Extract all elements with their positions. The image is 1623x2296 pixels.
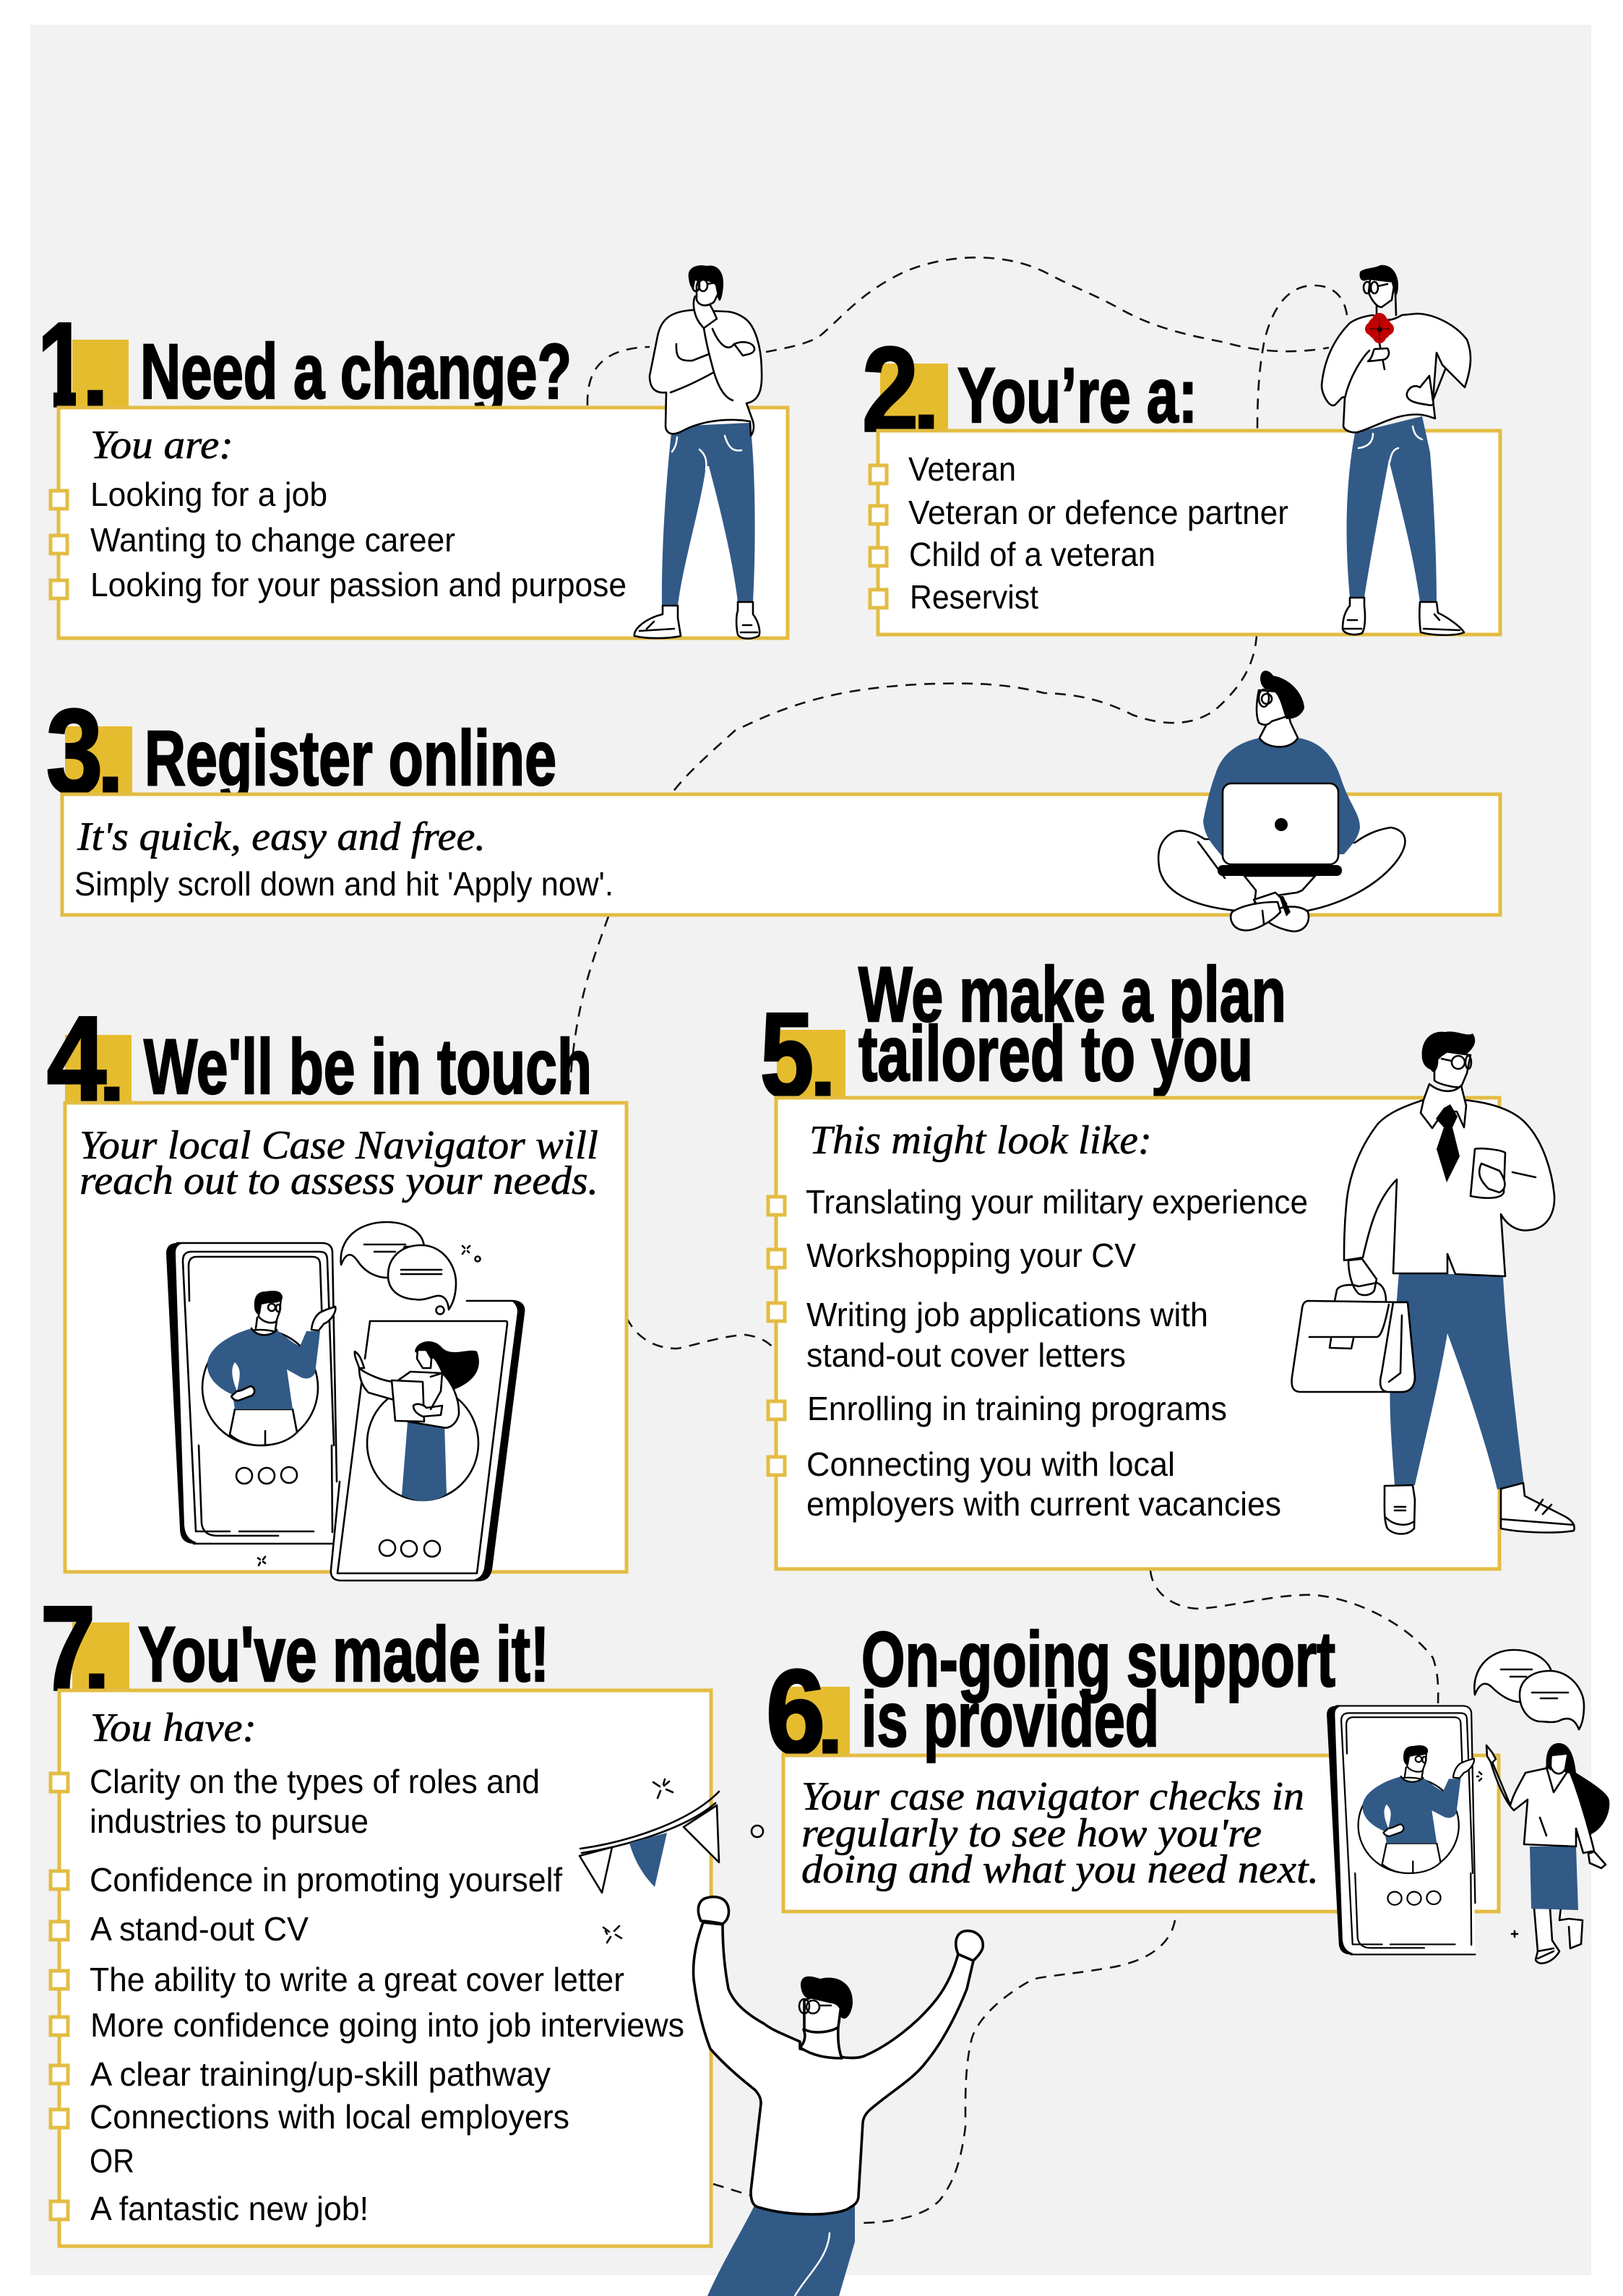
laptop: [1218, 783, 1342, 876]
step 7 section: [40, 1582, 983, 2296]
step 4 number: .: [97, 1005, 127, 1126]
step 2 heading: You’re a:: [957, 351, 1197, 439]
step 4 italic lead: Your local Case Navigator will: [79, 1123, 598, 1168]
step 5 heading: We make a plan: [858, 950, 1286, 1038]
bullet list: Reservist: [910, 578, 1038, 616]
three dots: [236, 1467, 297, 1484]
step 4 section: [47, 992, 627, 1581]
bullet list: Child of a veteran: [909, 536, 1155, 573]
step 6 heading: [861, 1615, 1335, 1763]
step 1 heading: Need a change?: [140, 327, 572, 415]
step 3 panel: [62, 794, 1500, 915]
bullet list: industries to pursue: [90, 1802, 369, 1840]
figure: celebrating man: [694, 1897, 983, 2296]
step 1 section: [38, 265, 788, 639]
step 7 number: .: [82, 1591, 112, 1713]
step 3 number: 3: [46, 685, 103, 819]
poppy flower: [1365, 313, 1394, 343]
illustration: phone with case navigator: [166, 1243, 337, 1544]
step 4 heading: We'll be in touch: [144, 1023, 592, 1110]
step 6 section: [766, 1615, 1609, 1964]
step 4 italic lead: reach out to assess your needs.: [79, 1158, 598, 1203]
step 4 italic lead: [79, 1123, 598, 1203]
bullet list: Workshopping your CV: [806, 1237, 1136, 1274]
step 6 heading: On-going support: [861, 1615, 1335, 1703]
step 4 panel: [65, 1103, 627, 1572]
bullet list: Writing job applications with: [806, 1296, 1208, 1333]
figure: thinking man: [634, 265, 762, 639]
step 6 italic lead: Your case navigator checks in: [801, 1774, 1304, 1819]
figure: businessman: [1292, 1031, 1575, 1534]
crossed feet: [1231, 876, 1315, 932]
step 5 italic lead: This might look like:: [809, 1118, 1152, 1163]
bullet list: More confidence going into job interviews: [90, 2006, 684, 2044]
step 1 badge: [72, 340, 129, 408]
step 3 italic lead: It's quick, easy and free.: [77, 814, 486, 859]
bullet list: [870, 450, 1288, 616]
step 7 panel: [51, 1690, 711, 2246]
bullet list: Confidence in promoting yourself: [90, 1861, 562, 1899]
illustration: phone with case navigator, small: [1327, 1706, 1475, 1954]
step 3 number: .: [95, 695, 126, 816]
step 2 badge: [880, 364, 948, 431]
figure: man holding poppy: [1322, 265, 1471, 635]
step 3 section: [46, 671, 1500, 932]
speech bubbles: [258, 1222, 480, 1565]
step 6 italic lead: regularly to see how you're: [801, 1811, 1262, 1856]
figure: veteran with speech bubbles: [1474, 1650, 1609, 1964]
step 6 number: 6: [766, 1646, 825, 1779]
bullet list: OR: [90, 2142, 134, 2180]
figure: man with laptop: [1158, 671, 1405, 932]
bullet list: employers with current vacancies: [806, 1485, 1281, 1523]
step 5 heading: [858, 950, 1286, 1097]
step 1 number: 1: [38, 298, 87, 432]
briefcase: [1292, 1283, 1415, 1392]
step 6 italic lead: [801, 1774, 1319, 1892]
step 7 badge: [72, 1622, 129, 1690]
step 4 badge: [65, 1035, 132, 1103]
bullet list: A clear training/up-skill pathway: [90, 2055, 551, 2093]
bullet list: Looking for a job: [90, 476, 327, 513]
bullet list: A fantastic new job!: [90, 2190, 369, 2227]
step 7 number: 7: [40, 1582, 95, 1716]
step 1 number: [43, 322, 103, 408]
step 1 panel: [51, 408, 788, 638]
illustration: phone with veteran: [331, 1301, 524, 1581]
bullet list: Veteran or defence partner: [908, 494, 1288, 531]
bullet list: [51, 476, 627, 603]
step 5 number: 5: [760, 989, 814, 1122]
bullet list: A stand-out CV: [90, 1910, 309, 1948]
step 6 number: .: [815, 1657, 845, 1779]
step 6 italic lead: doing and what you need next.: [801, 1847, 1319, 1892]
bullet list: stand-out cover letters: [806, 1336, 1126, 1374]
step 7 heading: You've made it!: [138, 1610, 549, 1698]
step 2 number: 2: [862, 323, 918, 457]
bullet list: Connections with local employers: [90, 2098, 569, 2136]
step 5 number: .: [808, 999, 838, 1121]
step 2 number: .: [911, 332, 942, 454]
bullet list: [768, 1183, 1308, 1523]
step 2 panel: [870, 431, 1500, 635]
step 5 heading: tailored to you: [858, 1010, 1253, 1097]
three dots: [379, 1540, 440, 1557]
bullet list: Translating your military experience: [806, 1183, 1308, 1221]
bunting flags: [580, 1779, 763, 1943]
step 1 number: .: [80, 308, 111, 429]
bullet list: The ability to write a great cover letter: [90, 1961, 624, 1998]
bullet list: Clarity on the types of roles and: [90, 1763, 540, 1800]
bullet list: Connecting you with local: [806, 1445, 1175, 1483]
step 1 italic lead: You are:: [90, 423, 233, 468]
step 6 badge: [782, 1687, 850, 1755]
step 5 section: [760, 950, 1575, 1569]
dashed connecting path: [569, 257, 1438, 2223]
step 5 badge: [777, 1030, 845, 1098]
bullet list: [51, 1763, 684, 2227]
step 5 panel: [768, 1098, 1499, 1569]
step 7 italic lead: You have:: [90, 1706, 257, 1750]
bullet list: Wanting to change career: [90, 521, 455, 559]
step 3 heading: Register online: [145, 714, 556, 801]
step 2 section: [862, 265, 1500, 635]
step 3 badge: [65, 726, 132, 794]
step 4 number: 4: [47, 992, 106, 1126]
step 6 heading: is provided: [861, 1675, 1159, 1763]
step 3 body text: Simply scroll down and hit 'Apply now'.: [74, 865, 614, 903]
bullet list: Veteran: [908, 450, 1016, 488]
step 6 panel: [783, 1755, 1499, 1912]
bullet list: Looking for your passion and purpose: [90, 566, 627, 603]
bullet list: Enrolling in training programs: [807, 1390, 1227, 1427]
